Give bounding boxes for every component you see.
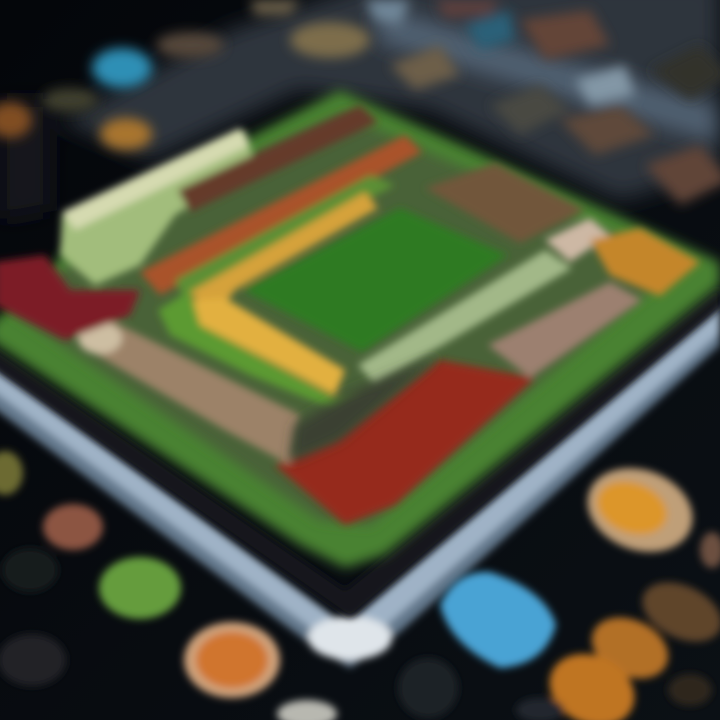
plot: red bottom [275,360,535,525]
plot: tan right [488,282,642,378]
token: orange lower one [582,606,678,690]
tile: brown top [156,32,224,58]
plot: pale pink tip [545,218,610,262]
plot: pale green strip right [358,250,572,385]
plot: yellow L bottom [188,298,345,396]
token: edge brown [700,532,720,568]
plot: orange strip [140,135,422,295]
token: dark five [668,674,712,706]
plot: central green field [243,208,508,352]
bed: green border [0,90,720,568]
token: dark three [2,548,58,592]
token: orange lower two [538,641,646,720]
planting bed [0,90,720,568]
plot: tan left [80,320,300,465]
top tiles [0,0,720,220]
tile: top right three [645,145,720,205]
tile: top right two [560,105,655,155]
plot: orange right [590,228,700,296]
tile: olive [42,88,98,112]
plot: pale green blob [60,130,255,285]
frame: light blue-grey tray [0,305,720,668]
tile: mid [490,85,570,135]
tile: orange edge [0,102,32,138]
bed: interior [10,115,680,525]
plot: brown strip [178,105,378,212]
token: green [99,557,181,619]
token: brown [633,571,720,653]
plot: yellow L top [190,192,378,318]
token: blue [440,572,556,668]
plot: green surround left [158,290,365,412]
tile: top right one [520,10,610,60]
token: orange [184,622,280,698]
plot: cream strip [62,128,250,230]
token: dark one [0,634,66,686]
plot: dark gap near bottom [290,355,440,462]
tile: light stripe [575,65,635,105]
plot: light green inner strip [175,175,395,300]
plot: brown top right [425,163,585,243]
token: white [277,700,337,720]
tile: tan top [290,22,370,58]
dark gap under bed [0,285,720,618]
plot: red left [0,255,140,340]
bottom tokens [0,451,720,720]
token: dark four [516,698,564,720]
tile: orange left [100,118,152,150]
token: amber [576,454,704,566]
tile: top edge [250,0,300,15]
plot: cream end [78,322,122,354]
token: red [43,504,103,550]
tile: blue [92,48,152,88]
tile: mid top blue [465,10,515,50]
token: dark two [398,658,458,718]
tile: mid top [390,45,460,90]
tile: top right four [650,45,720,100]
token: left edge [0,451,23,495]
